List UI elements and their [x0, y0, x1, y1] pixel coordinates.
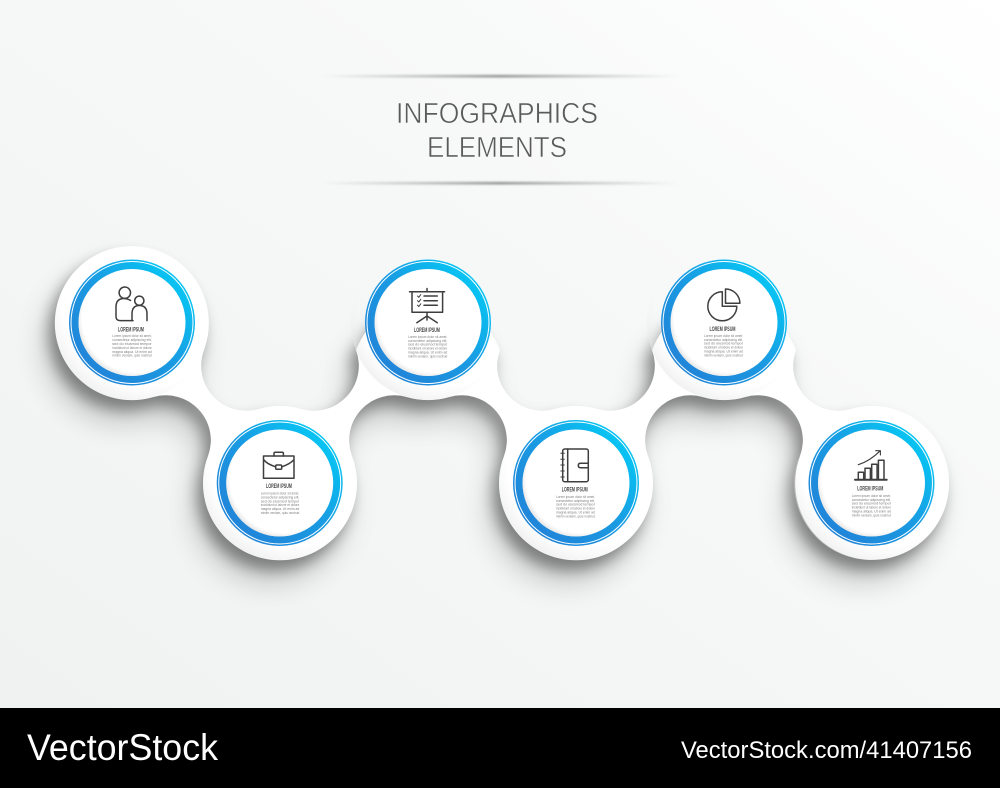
body text: incididunt ut labore et dolore: [852, 505, 891, 510]
body text: minim veniam, quis nostrud: [704, 352, 743, 357]
subtitle: ELEMENTS: [427, 132, 567, 164]
label: LOREM IPSUM: [414, 328, 440, 334]
body text: sed do eiusmod tempor: [556, 502, 596, 507]
body text: minim veniam, quis nostrud: [852, 512, 891, 517]
icon: people: [116, 287, 147, 321]
icon: briefcase: [264, 452, 294, 478]
body text: consectetur adipiscing elit,: [112, 337, 152, 342]
body text: [704, 333, 744, 357]
label: LOREM IPSUM: [562, 487, 588, 493]
body text: sed do eiusmod tempor: [261, 498, 300, 503]
label: LOREM IPSUM: [118, 327, 144, 333]
body text: magna aliqua. Ut enim ad: [556, 510, 595, 514]
body text: [556, 494, 596, 518]
label: LOREM IPSUM: [710, 327, 736, 333]
icon: notebook: [561, 449, 588, 482]
body text: minim veniam, quis nostrud: [261, 510, 299, 515]
body text: minim veniam, quis nostrud: [408, 353, 447, 358]
label: LOREM IPSUM: [857, 486, 883, 492]
body text: magna aliqua. Ut enim ad: [704, 348, 743, 354]
panel: step 1 people: [69, 260, 195, 386]
connected white timeline shape: [45, 246, 949, 582]
panel: step 6 growth chart: [808, 420, 934, 546]
body text: minim veniam, quis nostrud: [112, 353, 152, 358]
body text: [408, 334, 448, 358]
panel: step 5 pie chart: [661, 260, 787, 386]
footer band: [0, 708, 1000, 788]
label: LOREM IPSUM: [266, 484, 292, 490]
panel: step 3 presentation: [365, 260, 491, 386]
body text: sed do eiusmod tempor: [704, 341, 744, 346]
body text: [852, 493, 892, 517]
body text: magna aliqua. Ut enim ad: [408, 350, 447, 354]
body text: sed do eiusmod tempor: [852, 501, 892, 506]
body text: incididunt ut labore et dolore: [556, 506, 595, 511]
body text: consectetur adipiscing elit,: [704, 337, 743, 342]
body text: [112, 333, 152, 358]
body text: magna aliqua. Ut enim ad: [112, 349, 152, 354]
panel: step 2 briefcase: [217, 420, 343, 546]
body text: Lorem ipsum dolor sit amet,: [556, 494, 595, 499]
body text: Lorem ipsum dolor sit amet,: [112, 333, 152, 338]
body text: incididunt ut labore et dolore: [704, 345, 743, 350]
body text: minim veniam, quis nostrud: [556, 513, 595, 518]
panel: step 4 notebook: [513, 420, 639, 546]
body text: incididunt ut labore et dolore: [112, 345, 152, 350]
body text: [261, 490, 300, 515]
body text: Lorem ipsum dolor sit amet,: [408, 334, 447, 339]
body text: consectetur adipiscing elit,: [852, 497, 891, 502]
body text: Lorem ipsum dolor sit amet,: [852, 493, 891, 498]
body text: magna aliqua. Ut enim ad: [852, 508, 891, 514]
body text: Lorem ipsum dolor sit amet,: [261, 490, 299, 496]
body text: incididunt ut labore et dolore: [408, 346, 447, 351]
body text: sed do eiusmod tempor: [408, 342, 448, 347]
title block: [320, 75, 680, 184]
body text: Lorem ipsum dolor sit amet,: [704, 333, 743, 338]
body text: consectetur adipiscing elit,: [408, 338, 447, 343]
body text: incididunt ut labore et dolore: [261, 502, 299, 507]
icon: presentation board: [410, 288, 445, 323]
icon: pie chart: [708, 289, 740, 321]
body text: consectetur adipiscing elit,: [261, 494, 299, 499]
body text: sed do eiusmod tempor: [112, 341, 152, 346]
body text: consectetur adipiscing elit,: [556, 498, 595, 503]
body text: magna aliqua. Ut enim ad: [261, 506, 299, 511]
footer image id: VectorStock.com/41407156: [681, 737, 972, 764]
title: INFOGRAPHICS: [396, 98, 598, 130]
icon: growth bar chart: [855, 451, 887, 480]
footer logo text: VectorStock: [27, 727, 218, 768]
